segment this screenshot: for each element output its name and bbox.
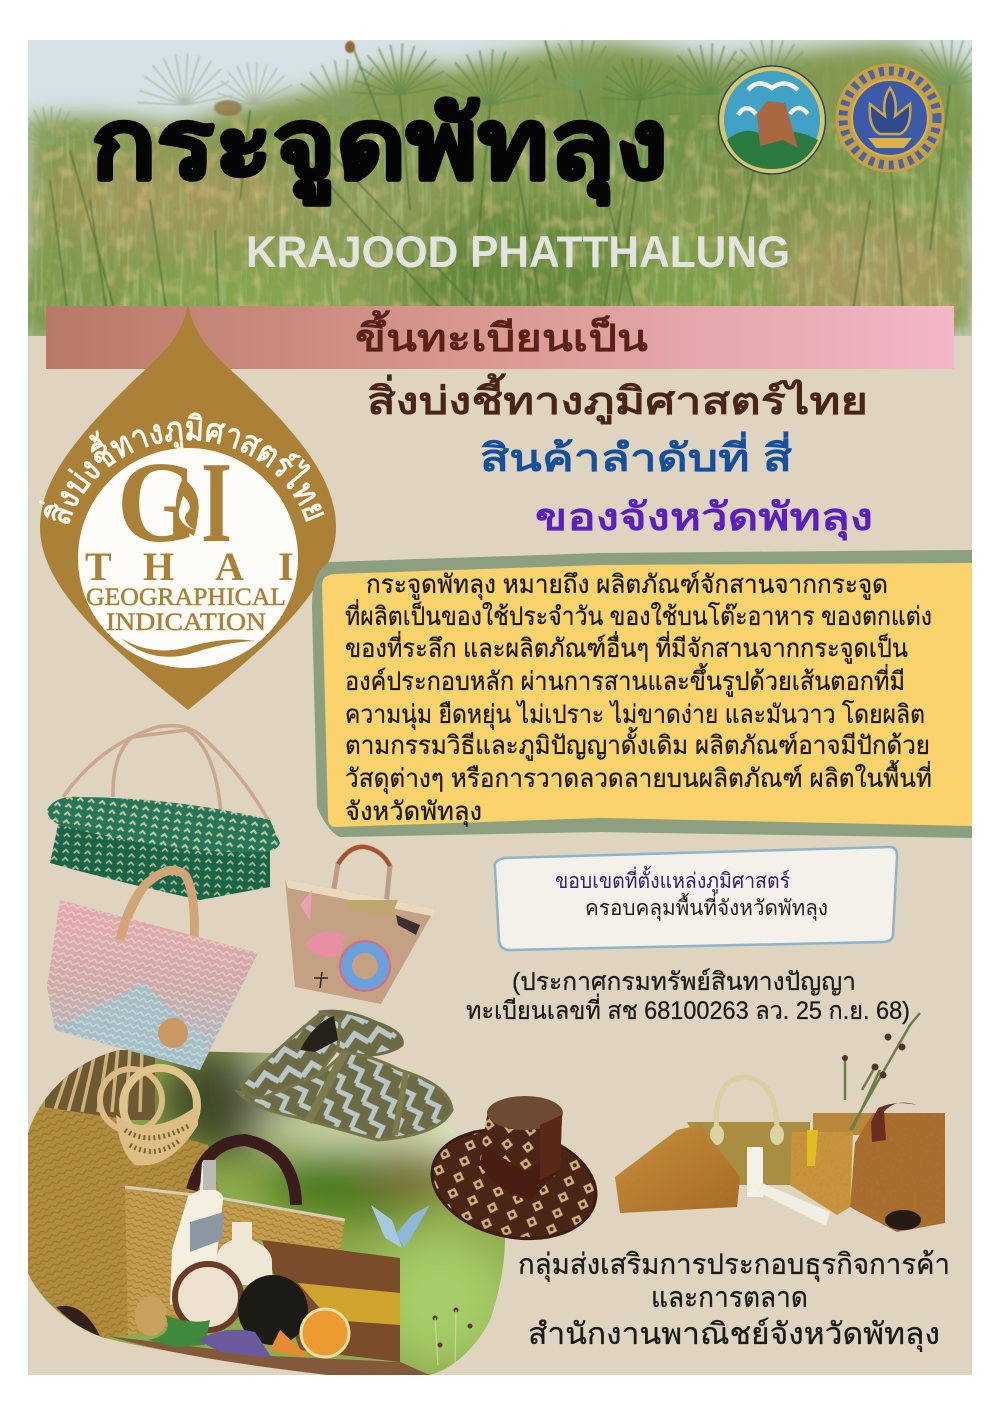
product photo background <box>28 1040 520 1380</box>
callout: geographic boundary <box>495 847 897 950</box>
GI Thai badge: THAI <box>85 544 294 589</box>
product: woven slippers <box>238 1011 452 1140</box>
GI Thai badge: G <box>117 439 199 567</box>
photo header: papyrus field <box>0 38 1000 340</box>
banner <box>46 306 954 369</box>
description panel: ของที่ระลึก และผลิตภัณฑ์อื่นๆ ที่มีจักสานจากกระจูดเป็น <box>345 631 908 664</box>
announcement text: ทะเบียนเลขที่ สช 68100263 ลว. 25 ก.ย. 68) <box>466 993 910 1025</box>
logo: Phatthalung province seal <box>718 66 826 174</box>
logo: Ministry of Commerce seal <box>836 64 944 172</box>
footer: office name <box>518 1249 950 1353</box>
product: straw bag set with reeds <box>615 1013 945 1232</box>
footer: office name: และการตลาด <box>651 1282 808 1314</box>
description panel: จังหวัดพัทลุง <box>345 798 482 827</box>
description panel: องค์ประกอบหลัก ผ่านการสานและขึ้นรูปด้วยเส้นตอกที่มี <box>345 663 905 697</box>
callout: geographic boundary: ครอบคลุมพื้นที่จังหวัดพัทลุง <box>585 893 828 921</box>
icon: blue butterfly <box>371 1205 430 1248</box>
product: flamingo bag <box>285 847 435 1004</box>
product: pink and blue tote <box>47 870 258 1070</box>
description panel: ความนุ่ม ยืดหยุ่น ไม่เปราะ ไม่ขาดง่าย และมันวาว โดยผลิต <box>345 700 925 730</box>
heading: registered GI text: ของจังหวัดพัทลุง <box>535 497 873 541</box>
description panel: กระจูดพัทลุง หมายถึง ผลิตภัณฑ์จักสานจากกระจูด <box>366 570 888 600</box>
description panel: ตามกรรมวิธีและภูมิปัญญาดั้งเดิม ผลิตภัณฑ์อาจมีปักด้วย <box>345 727 930 761</box>
banner: ขึ้นทะเบียนเป็น <box>355 310 648 360</box>
product: cosmetics <box>108 1160 430 1375</box>
product: straw bag with round handles <box>28 1068 220 1338</box>
callout: geographic boundary: ขอบเขตที่ตั้งแหล่งภูมิศาสตร์ <box>555 866 790 894</box>
product: woven hat <box>422 1096 606 1253</box>
heading: registered GI text: สินค้าลำดับที่ สี่ <box>480 431 793 480</box>
heading: registered GI text: สิ่งบ่งชี้ทางภูมิศาสตร์ไทย <box>367 373 868 425</box>
GI Thai badge <box>38 304 336 710</box>
announcement text: (ประกาศกรมทรัพย์สินทางปัญญา <box>512 968 856 996</box>
GI Thai badge: สิ่งบ่งชี้ทางภูมิศาสตร์ไทย <box>38 412 325 524</box>
GI Thai badge: I <box>201 439 232 567</box>
heading: registered GI text <box>367 373 873 541</box>
description panel: วัสดุต่างๆ หรือการวาดลวดลายบนผลิตภัณฑ์ ผลิตในพื้นที่ <box>345 760 932 794</box>
footer: office name: สำนักงานพาณิชย์จังหวัดพัทลุง <box>528 1317 940 1353</box>
product: green woven basket <box>47 726 280 900</box>
subtitle: KRAJOOD PHATTHALUNG <box>246 228 790 277</box>
GI Thai badge: GEOGRAPHICAL <box>86 584 286 611</box>
title: กระจูดพัทลุง <box>91 89 668 206</box>
product: woven tote with brown handle <box>125 1140 400 1362</box>
description panel <box>312 550 972 838</box>
description panel: ที่ผลิตเป็นของใช้ประจำวัน ของใช้บนโต๊ะอาหาร ของตกแต่ง <box>345 599 932 631</box>
footer: office name: กลุ่มส่งเสริมการประกอบธุรกิจการค้า <box>518 1249 950 1282</box>
announcement text <box>466 968 910 1025</box>
GI Thai badge: INDICATION <box>106 609 266 636</box>
